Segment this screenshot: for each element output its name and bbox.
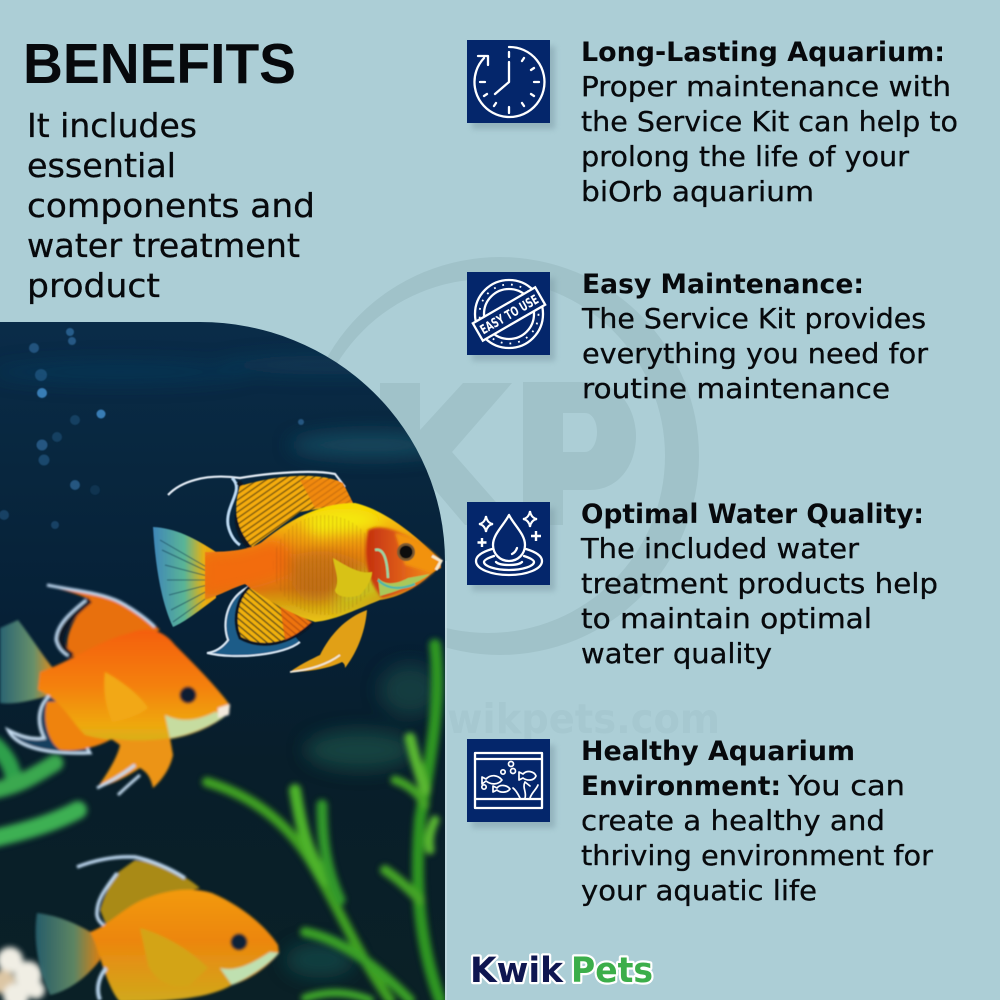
watermark: KP logo and site name: wikpets.com — [447, 695, 720, 743]
coral — [0, 947, 45, 1000]
heading and text: healthy aquarium environment: create a healthy and — [581, 804, 885, 837]
heading and text: easy maintenance: everything you need for — [582, 337, 929, 370]
heading and text: optimal water quality: treatment products help — [581, 567, 938, 600]
heading and text: long-lasting aquarium: Proper maintenance with — [581, 70, 951, 103]
heading and text: easy maintenance: routine maintenance — [582, 372, 890, 405]
intro text: components and — [27, 186, 315, 225]
heading and text: healthy aquarium environment: You can — [787, 769, 905, 802]
heading and text: optimal water quality: The included water — [580, 532, 860, 565]
intro text: essential — [27, 146, 176, 185]
fish: lower — [36, 857, 279, 1000]
icon: easy to use stamp: EASY TO USE — [478, 293, 542, 338]
heading and text: healthy aquarium environment: your aquatic life — [581, 874, 817, 907]
heading and text: easy maintenance: Easy Maintenance: — [582, 269, 864, 300]
heading and text: optimal water quality — [580, 499, 938, 670]
icon: easy to use stamp — [467, 272, 555, 361]
heading and text: healthy aquarium environment: Healthy Aquarium — [581, 736, 855, 767]
heading and text: healthy aquarium environment: thriving environment for — [581, 839, 933, 872]
icon: clock — [467, 40, 555, 129]
heading and text: optimal water quality: to maintain optimal — [581, 602, 872, 635]
icon: fish tank — [467, 739, 555, 828]
heading and text: optimal water quality: water quality — [581, 637, 772, 670]
heading and text: easy maintenance: The Service Kit provides — [581, 302, 926, 335]
heading and text: easy maintenance — [581, 269, 929, 405]
plants — [0, 645, 440, 1000]
intro text: water treatment — [27, 226, 300, 265]
logo: Kwik Pets: Pets — [571, 951, 653, 991]
heading and text: long-lasting aquarium: Long-Lasting Aquarium: — [581, 37, 945, 68]
heading and text: long-lasting aquarium: biOrb aquarium — [581, 175, 814, 208]
title: BENEFITS — [23, 32, 296, 96]
aquarium photo panel — [0, 320, 450, 1000]
watermark: KP logo and site name — [301, 257, 720, 743]
logo: Kwik Pets: Kwik — [470, 951, 564, 991]
fish: middle — [0, 585, 230, 795]
logo: Kwik Pets — [470, 951, 653, 991]
heading and text: long-lasting aquarium: prolong the life of your — [581, 140, 909, 173]
heading and text: optimal water quality: Optimal Water Quality: — [581, 499, 924, 530]
heading and text: healthy aquarium environment — [581, 736, 933, 907]
heading and text: long-lasting aquarium: the Service Kit can help to — [581, 105, 958, 138]
heading and text: long-lasting aquarium — [581, 37, 958, 208]
intro text: product — [27, 266, 160, 305]
intro text: It includes — [27, 106, 197, 145]
icon: water drop with ripples — [467, 502, 555, 591]
heading and text: healthy aquarium environment: Environment: — [581, 771, 781, 802]
bubbles — [0, 328, 304, 529]
fish: upper — [153, 472, 441, 672]
intro text — [27, 106, 315, 305]
background haze — [46, 354, 432, 983]
